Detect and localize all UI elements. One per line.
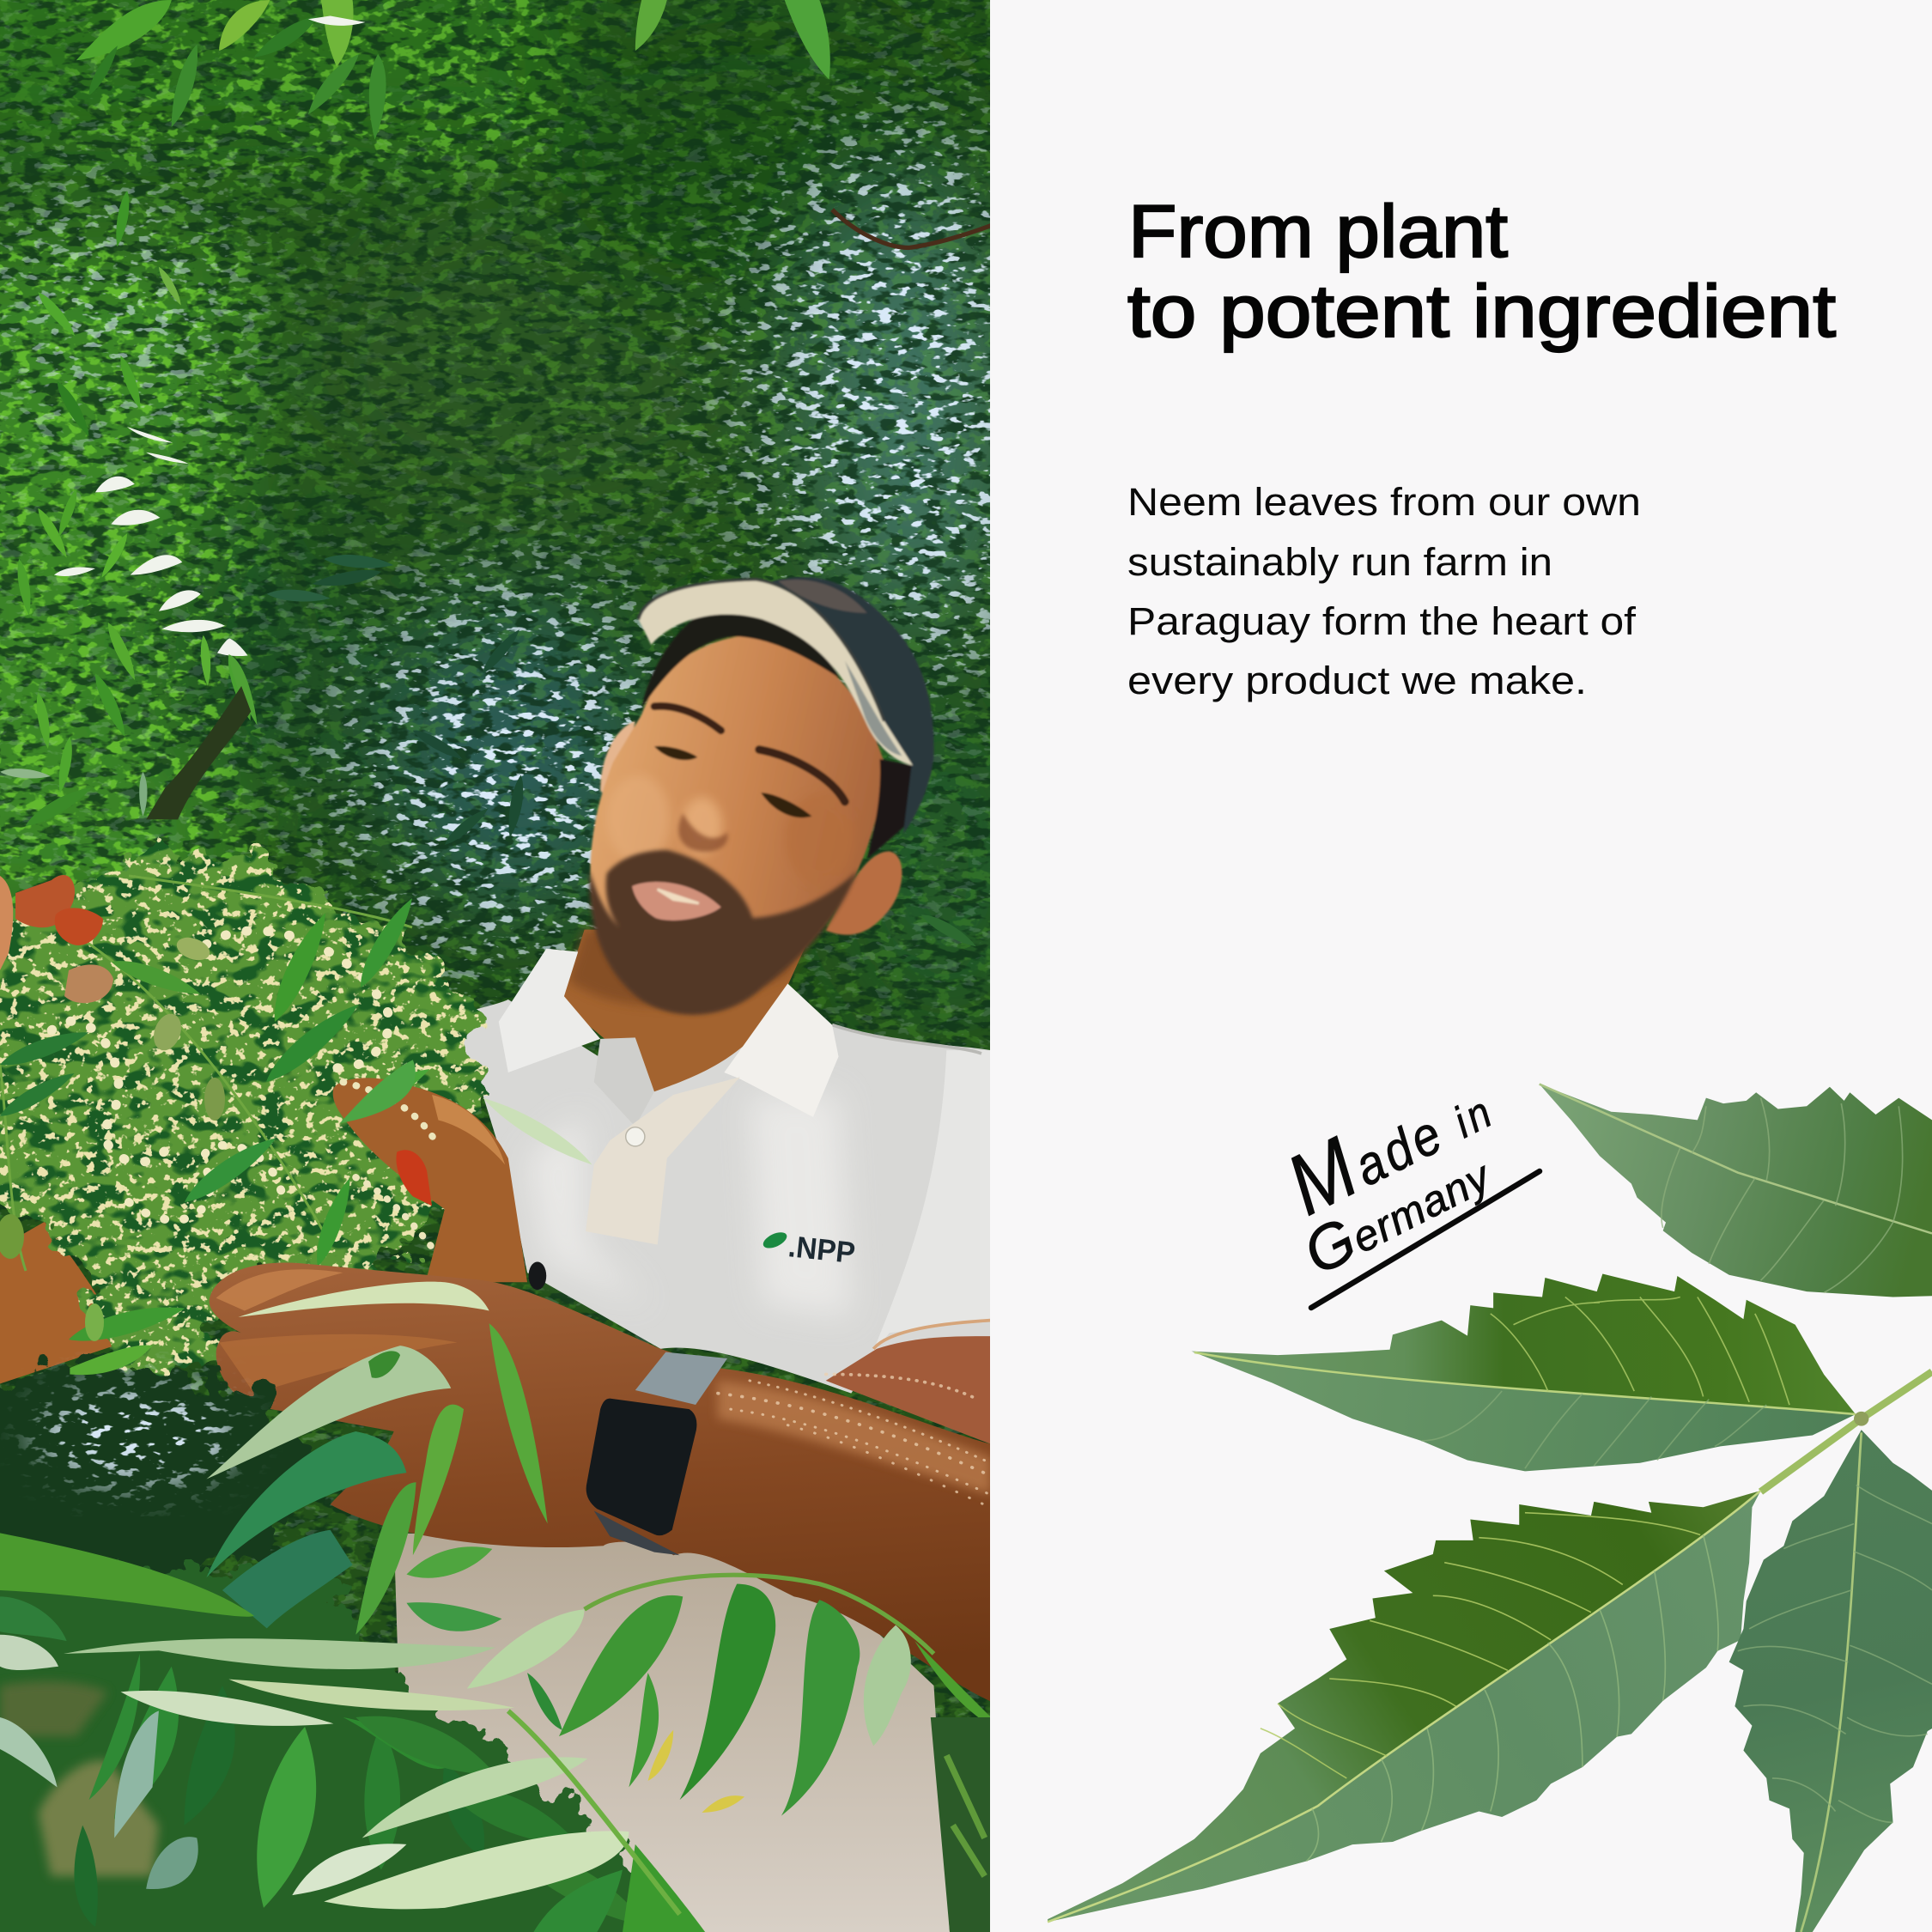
collar left <box>499 949 600 1072</box>
stems <box>1761 1371 1932 1492</box>
shirt light folds <box>527 1095 851 1317</box>
fingers at far left <box>0 875 113 1003</box>
lower dark foliage mass <box>0 1558 686 1932</box>
main forearm and hand <box>210 1262 991 1701</box>
head <box>589 577 934 1015</box>
cap brim <box>638 580 913 765</box>
handwritten note: Made in Germany <box>1273 1052 1540 1308</box>
heading: to potent ingredient <box>1127 270 1836 353</box>
stem above hanging leaflets <box>585 1575 934 1654</box>
face <box>591 635 884 1004</box>
bottom right of foreground cluster <box>623 1844 705 1932</box>
right forearm behind <box>826 1336 991 1444</box>
heading <box>1127 191 1836 353</box>
small leaf on hand <box>340 1060 416 1123</box>
right ear <box>826 851 902 935</box>
neem leaf illustration <box>1048 1084 1932 1932</box>
handwritten note: Made in Germany: Germany <box>1293 1137 1502 1288</box>
sleeve <box>872 1050 991 1355</box>
flower cluster <box>0 0 990 1932</box>
body text: every product we make. <box>1127 659 1587 702</box>
leaflet: middle <box>1192 1273 1856 1471</box>
beard <box>589 850 858 1015</box>
logo: NPP shirt embroidery: .NPP <box>787 1230 857 1270</box>
heading: From plant <box>1128 191 1508 273</box>
picked red fruit <box>396 1150 432 1206</box>
body text <box>1127 480 1641 702</box>
body text: sustainably run farm in <box>1127 540 1552 584</box>
neck <box>562 930 813 1091</box>
watch face <box>586 1399 696 1535</box>
leaflet: lower left <box>1048 1491 1761 1922</box>
watch band bottom <box>594 1511 680 1555</box>
pale horizontal leaflets <box>64 1638 495 1669</box>
shirt upper body <box>406 999 991 1394</box>
handwritten note: Made in Germany: Madein <box>1273 1052 1506 1233</box>
brows <box>654 706 721 731</box>
arms and hands <box>210 1060 991 1701</box>
hand holding flowers <box>333 1078 527 1282</box>
foreground leaves <box>0 1282 991 1932</box>
pale and teal leaves near hand <box>206 1431 406 1577</box>
far arm elbow <box>0 1222 124 1384</box>
left ear <box>600 721 635 807</box>
leaves among flowers <box>0 893 434 1349</box>
photo panel: farmer harvesting neem <box>0 0 1030 1932</box>
canopy leaves: upper branches (hand placed) <box>0 0 991 951</box>
small dark bracelet bead <box>529 1262 546 1290</box>
shirt lower body <box>394 1533 950 1932</box>
collar right <box>724 983 839 1117</box>
leaflet: right <box>1729 1430 1932 1932</box>
white lit leaves <box>54 15 365 656</box>
leaflet: top right <box>1540 1084 1932 1297</box>
big foreground left leaves <box>0 1533 254 1617</box>
leaves softening foliage edge against shirt <box>355 1716 495 1775</box>
eyes <box>654 746 697 760</box>
ground patch <box>0 1681 159 1876</box>
hair <box>641 609 840 708</box>
leaf joint <box>1854 1412 1868 1426</box>
flowers over the hand <box>343 1082 438 1248</box>
body text: Paraguay form the heart of <box>1127 599 1637 643</box>
lower left shadow foliage with sky flecks <box>0 0 990 1932</box>
shirt <box>394 930 991 1932</box>
lower right corner foliage <box>931 1717 991 1932</box>
logo: leaf mark <box>761 1229 789 1251</box>
watch band top <box>635 1352 727 1405</box>
pale long leaf right of cluster <box>483 1098 592 1164</box>
tree trunk shadow <box>146 686 251 819</box>
cap crown <box>772 577 934 834</box>
mouth <box>632 882 721 920</box>
hanging leaflets <box>559 1595 683 1736</box>
photo background: tree canopy <box>0 0 1030 1932</box>
body text: Neem leaves from our own <box>1127 480 1641 524</box>
placket <box>586 1077 740 1245</box>
